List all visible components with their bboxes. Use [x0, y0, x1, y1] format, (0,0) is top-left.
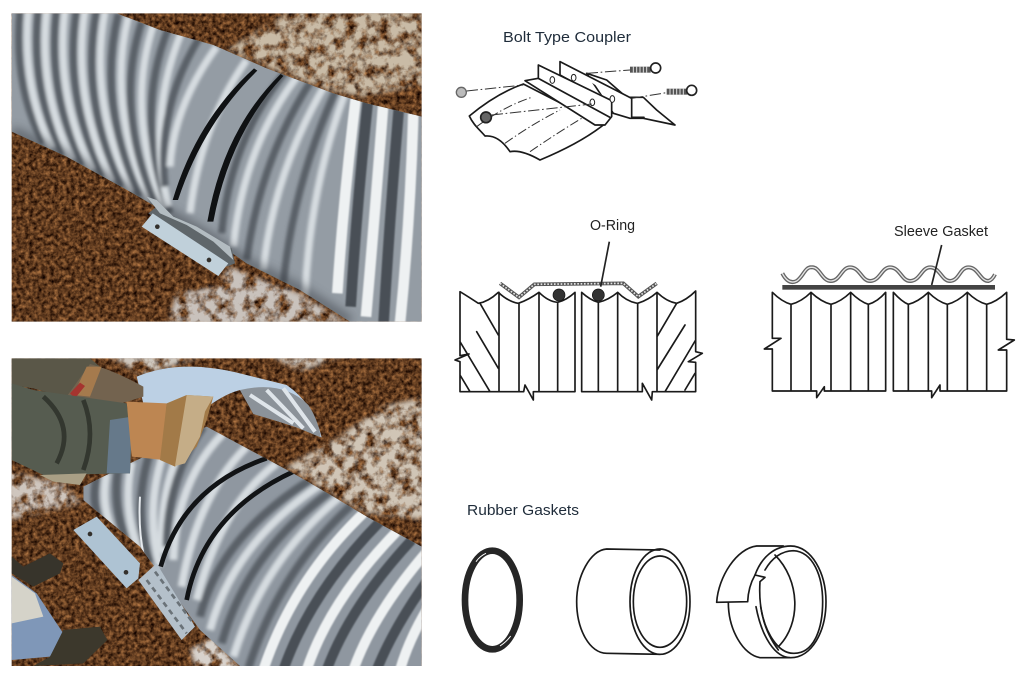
left angle flange — [525, 65, 612, 125]
O-ring gasket — [465, 551, 520, 649]
bolt centre lines — [467, 70, 667, 115]
left pipe section — [764, 292, 886, 398]
right pipe section — [893, 292, 1014, 398]
left pipe section — [455, 292, 575, 400]
arrow line: sleeve gasket — [932, 245, 942, 285]
corrugated pipe — [12, 10, 422, 330]
coupler flanges below the pipe — [73, 517, 195, 640]
diagram: bolt type coupler — [456, 62, 697, 160]
bolt, upper — [630, 63, 661, 73]
curved coupler half-band being lifted — [137, 367, 322, 437]
black rubber O-rings on pipe — [161, 458, 293, 600]
corrugated coupler band — [782, 267, 995, 282]
sleeve gasket bar — [782, 285, 995, 290]
label: Sleeve Gasket: Sleeve Gasket — [894, 223, 989, 240]
corrugated pipe — [83, 426, 422, 666]
coupler band — [500, 283, 657, 297]
heading: Rubber Gaskets: Rubber Gaskets — [467, 502, 579, 519]
worker's legs and boots — [12, 553, 107, 666]
lower corrugated pipe section — [469, 84, 603, 160]
photo: worker fitting the coupler band over the pipe — [8, 355, 453, 670]
label: O-Ring: O-Ring — [590, 217, 635, 234]
snow patches on ground — [8, 355, 427, 670]
right angle flange — [560, 62, 644, 117]
diagram: O-ring joint cross section — [455, 242, 702, 400]
O-ring seals — [553, 289, 604, 301]
upper right pipe section — [587, 73, 675, 125]
nuts — [456, 87, 491, 123]
black rubber O-rings on pipe — [173, 68, 283, 222]
bolt, lower — [667, 85, 697, 95]
snow patch on ground, upper right — [227, 10, 427, 97]
snow patch on ground, bottom — [167, 267, 350, 325]
bolt coupler flange on the ground — [142, 197, 235, 276]
worker's arms and gloves — [12, 358, 213, 485]
right pipe section — [582, 291, 702, 400]
diagram: sleeve gasket joint cross section — [764, 245, 1014, 398]
arrow line: O-ring — [601, 242, 609, 287]
photo: assembled pipe joint with bolt coupler — [12, 10, 427, 330]
heading: Bolt Type Coupler: Bolt Type Coupler — [503, 29, 631, 46]
pipe lower-edge shading — [12, 132, 350, 322]
diagram: rubber gasket types — [465, 546, 826, 658]
bolt holes — [550, 74, 615, 106]
full sleeve gasket — [577, 549, 690, 654]
split sleeve gasket — [717, 546, 826, 658]
